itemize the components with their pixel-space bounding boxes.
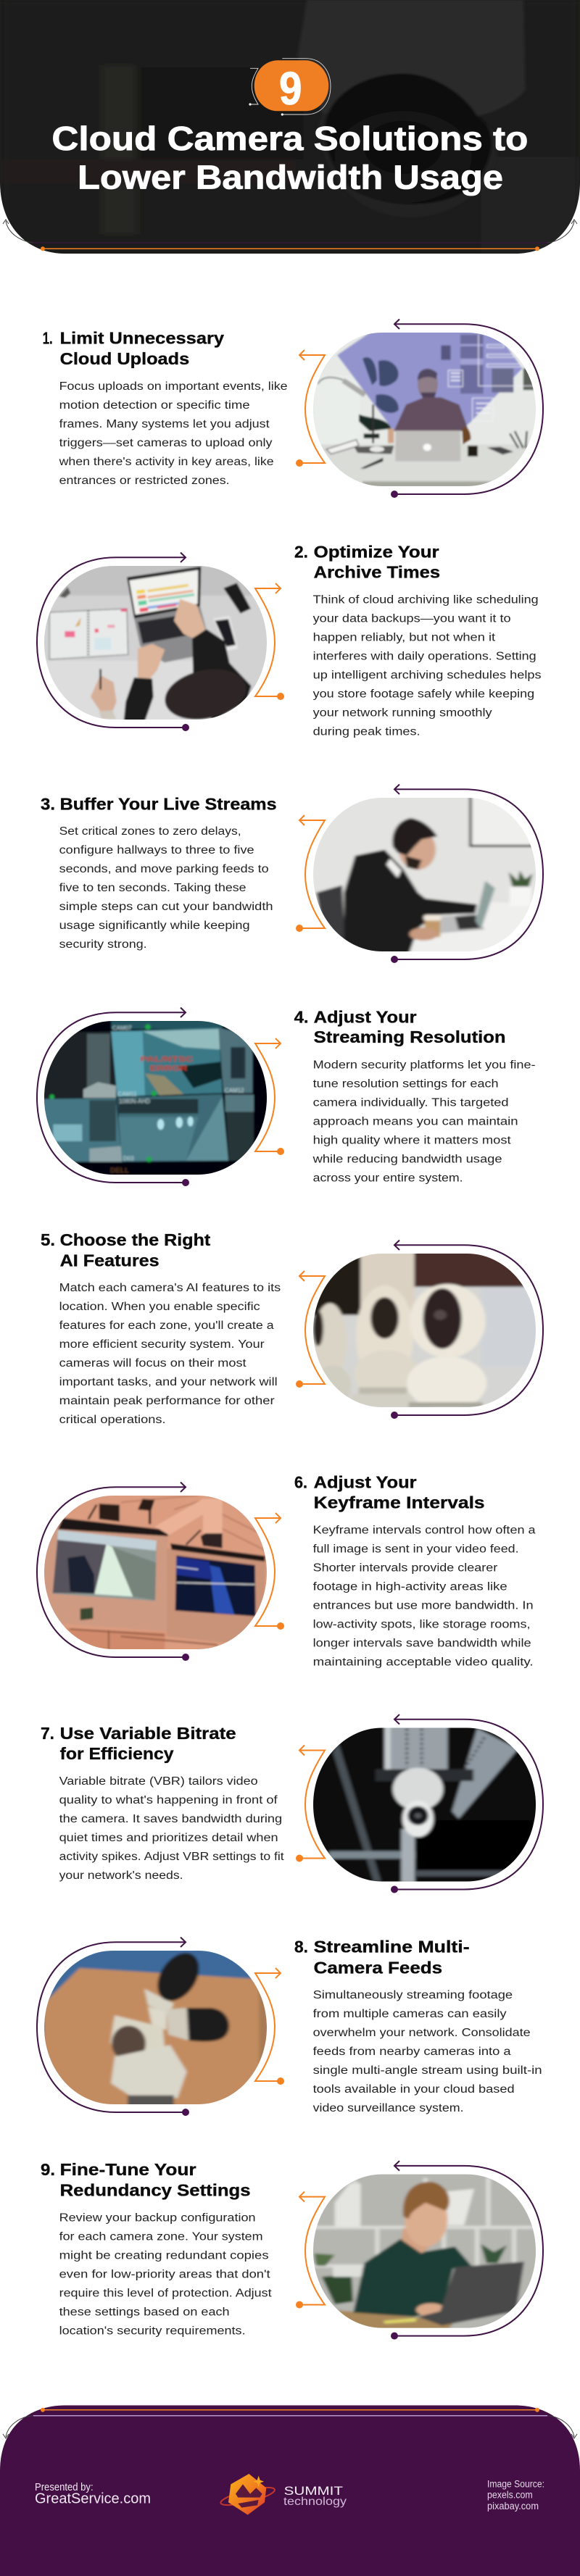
body text 7 <box>59 1775 284 1882</box>
body text 4: tune resolution settings for each <box>313 1077 499 1090</box>
section 1: limit uploads <box>43 319 543 498</box>
heading 7: Use Variable Bitrate <box>60 1724 236 1743</box>
heading 5 <box>41 1230 211 1270</box>
orange arrow 1 <box>296 350 325 467</box>
body text 2: interferes with daily operations. Setting <box>313 650 536 662</box>
body text 9: even for low-priority areas that don't <box>59 2268 270 2281</box>
body text 7: quality to what's happening in front of <box>59 1794 278 1806</box>
orange arrow 3 <box>296 815 325 932</box>
body text 2: Think of cloud archiving like scheduling <box>313 593 539 606</box>
body text 2: your network running smoothly <box>313 706 492 719</box>
body text 3: simple steps can cut your bandwidth <box>59 901 273 913</box>
body text 1: frames. Many systems let you adjust <box>59 418 270 430</box>
heading 2 <box>294 542 440 582</box>
footer panel <box>0 2406 580 2576</box>
heading 7 <box>41 1724 236 1763</box>
body text 5: cameras will focus on their most <box>59 1357 246 1370</box>
purple arrow 4 <box>37 1007 189 1186</box>
body text 7: the camera. It saves bandwidth during <box>59 1813 282 1825</box>
body text 2: happen reliably, but not when it <box>313 631 496 643</box>
image sources <box>487 2478 544 2512</box>
heading 4: Adjust Your <box>314 1007 417 1026</box>
body text 5: location. When you enable specific <box>59 1301 260 1313</box>
section 5: AI features <box>41 1230 543 1426</box>
body text 9: require this level of protection. Adjust <box>59 2287 272 2300</box>
body text 6: Shorter intervals provide clearer <box>313 1562 497 1574</box>
header background photo: security camera <box>0 0 580 254</box>
presented by <box>35 2482 151 2507</box>
heading 6: Keyframe Intervals <box>314 1493 485 1512</box>
photo: CCTV monitor wall: CAM07 <box>112 1025 132 1032</box>
orange arrow 6 <box>255 1513 284 1630</box>
company logo <box>220 2474 347 2515</box>
body text 9: these settings based on each <box>59 2306 230 2319</box>
body text 8: Simultaneously streaming footage <box>313 1989 513 2001</box>
body text 8: video surveillance system. <box>313 2102 464 2114</box>
heading 1: Limit Unnecessary <box>60 329 224 348</box>
purple arrow 6 <box>37 1483 189 1661</box>
body text 5 <box>59 1282 281 1426</box>
photo: CCTV monitor wall: 1080N-AHD <box>119 1098 150 1104</box>
purple arrow 1 <box>391 319 543 498</box>
body text 6: low-activity spots, like storage rooms, <box>313 1618 531 1630</box>
body text 1: when there's activity in key areas, like <box>58 456 274 468</box>
body text 4: Modern security platforms let you fine- <box>313 1059 536 1071</box>
section 2: archive times <box>37 542 542 738</box>
body text 4: across your entire system. <box>313 1172 463 1184</box>
orange arrow 2 <box>255 583 284 700</box>
photo: dome camera on ceiling <box>311 1725 540 1885</box>
presented by: Presented by: <box>35 2482 94 2493</box>
body text 7: activity spikes. Adjust VBR settings to fit <box>59 1851 284 1863</box>
body text 7: Variable bitrate (VBR) tailors video <box>59 1775 258 1788</box>
body text 9 <box>59 2212 272 2338</box>
presented by: GreatService.com <box>35 2491 151 2507</box>
heading 9 <box>41 2160 251 2200</box>
company logo: technology <box>283 2496 347 2508</box>
photo: row of white cameras <box>311 1250 540 1409</box>
body text 3 <box>59 825 273 951</box>
heading 3: 3. <box>41 794 55 813</box>
body text 5: features for each zone, you'll create a <box>59 1320 274 1332</box>
body text 8: single multi-angle stream using built-in <box>313 2064 542 2077</box>
body text 3: seconds, and move parking feeds to <box>59 863 269 875</box>
section 4: streaming resolution <box>37 1007 536 1186</box>
heading 1: 1. <box>43 329 53 348</box>
body text 8 <box>313 1989 542 2114</box>
body text 1 <box>58 380 288 487</box>
body text 2: up intelligent archiving schedules helps <box>313 669 542 681</box>
heading 1 <box>43 329 224 368</box>
body text 4: approach means you can maintain <box>313 1115 518 1127</box>
number badge <box>249 59 331 116</box>
body text 6: longer intervals save bandwidth while <box>313 1637 531 1649</box>
body text 4: while reducing bandwidth usage <box>312 1153 502 1165</box>
body text 6: full image is sent in your video feed. <box>313 1543 519 1555</box>
photo: CCTV monitor wall: DELL <box>110 1167 129 1175</box>
body text 6: maintaining acceptable video quality. <box>313 1656 534 1668</box>
footer accent lines <box>3 2408 577 2438</box>
photo: platform monitors <box>41 1493 270 1652</box>
body text 5: Match each camera's AI features to its <box>59 1282 281 1294</box>
orange arrow 9 <box>296 2192 325 2309</box>
heading 4: 4. <box>294 1007 309 1026</box>
heading 2: 2. <box>294 542 308 561</box>
section 7: variable bitrate <box>41 1714 543 1893</box>
body text 6: entrances but use more bandwidth. In <box>313 1599 534 1612</box>
photo: overhead desk with laptop <box>41 564 270 727</box>
heading 5: Choose the Right <box>60 1230 211 1249</box>
image sources: Image Source: <box>487 2478 544 2490</box>
heading 7: 7. <box>41 1724 54 1743</box>
photo: CCTV monitor wall <box>41 1018 270 1177</box>
image sources: pexels.com <box>487 2490 533 2501</box>
purple arrow 9 <box>391 2161 543 2340</box>
heading 9: Redundancy Settings <box>60 2181 251 2200</box>
body text 5: maintain peak performance for other <box>59 1395 275 1407</box>
header panel <box>0 0 580 254</box>
body text 3: configure hallways to three to five <box>59 844 254 856</box>
body text 3: security strong. <box>59 938 147 951</box>
body text 8: tools available in your cloud based <box>313 2083 515 2096</box>
company logo: SUMMIT <box>284 2484 343 2498</box>
heading 3: Buffer Your Live Streams <box>60 794 277 813</box>
heading 6: 6. <box>294 1472 307 1491</box>
body text 1: Focus uploads on important events, like <box>59 380 288 393</box>
orange arrow 8 <box>255 1968 284 2085</box>
body text 4: high quality where it matters most <box>313 1134 511 1146</box>
body text 2: during peak times. <box>313 725 420 738</box>
heading 2: Archive Times <box>314 563 440 582</box>
heading 5: 5. <box>41 1230 55 1249</box>
body text 7: quiet times and prioritizes detail when <box>59 1832 278 1844</box>
title: Cloud Camera Solutions to <box>51 120 528 157</box>
photo: cluster of bullet cameras <box>41 1948 270 2107</box>
section 8: multi-camera feeds <box>37 1938 542 2116</box>
body text 4: camera individually. This targeted <box>313 1096 509 1109</box>
body text 8: from multiple cameras can easily <box>313 2008 507 2020</box>
body text 8: overwhelm your network. Consolidate <box>313 2027 531 2039</box>
photo: CCTV monitor wall: ERROR <box>150 1065 187 1073</box>
orange arrow 7 <box>296 1745 325 1862</box>
purple arrow 5 <box>391 1241 543 1419</box>
body text 1: motion detection or specific time <box>59 399 250 412</box>
photo: man at laptop <box>312 331 539 488</box>
purple arrow 8 <box>37 1938 189 2116</box>
photo: CCTV monitor wall: CAM11 <box>118 1091 137 1097</box>
body text 9: location's security requirements. <box>59 2325 246 2338</box>
heading 1: Cloud Uploads <box>60 349 189 368</box>
purple arrow 2 <box>37 552 189 731</box>
heading 4 <box>294 1007 506 1046</box>
body text 3: usage significantly while keeping <box>59 920 250 932</box>
title: Lower Bandwidth Usage <box>78 159 503 196</box>
heading 2: Optimize Your <box>314 542 439 561</box>
image sources: pixabay.com <box>487 2501 539 2512</box>
body text 2 <box>313 593 542 738</box>
photo: CCTV monitor wall: D03 <box>123 1156 134 1162</box>
photo: man in hoodie at laptop <box>311 795 540 955</box>
heading 8: 8. <box>294 1938 308 1956</box>
body text 9: Review your backup configuration <box>59 2212 256 2225</box>
section 6: keyframe intervals <box>37 1472 536 1668</box>
body text 2: your data backups—you want it to <box>313 612 511 625</box>
body text 2: you store footage safely while keeping <box>313 688 534 700</box>
body text 3: five to ten seconds. Taking these <box>59 882 246 894</box>
body text 5: more efficient security system. Your <box>59 1338 265 1351</box>
body text 7: your network's needs. <box>59 1870 183 1882</box>
heading 6: Adjust Your <box>314 1472 417 1491</box>
body text 3: Set critical zones to zero delays, <box>59 825 241 838</box>
heading 8: Camera Feeds <box>314 1958 442 1977</box>
purple arrow 7 <box>391 1714 543 1893</box>
body text 1: entrances or restricted zones. <box>59 475 230 487</box>
body text 6: Keyframe intervals control how often a <box>313 1524 536 1536</box>
body text 4 <box>312 1059 536 1184</box>
heading 4: Streaming Resolution <box>314 1028 506 1046</box>
photo: young man at laptop <box>311 2172 540 2330</box>
body text 9: for each camera zone. Your system <box>59 2230 263 2243</box>
number badge: 9 <box>279 62 302 114</box>
body text 6: footage in high-activity areas like <box>313 1580 508 1593</box>
header accent lines <box>3 220 577 251</box>
orange arrow 4 <box>255 1038 284 1155</box>
body text 6 <box>313 1524 536 1668</box>
photo: CCTV monitor wall: PAL/NTSC <box>140 1056 194 1064</box>
section 9: redundancy settings <box>41 2160 543 2340</box>
heading 5: AI Features <box>60 1251 160 1270</box>
body text 9: might be creating redundant copies <box>59 2249 269 2262</box>
orange arrow 5 <box>296 1271 325 1388</box>
body text 5: important tasks, and your network will <box>59 1376 278 1388</box>
section 3: buffer live streams <box>41 784 543 963</box>
title <box>51 120 528 196</box>
logo mark <box>220 2474 276 2515</box>
heading 8: Streamline Multi- <box>314 1938 470 1956</box>
body text 5: critical operations. <box>59 1414 166 1426</box>
purple arrow 3 <box>391 784 543 963</box>
body text 8: feeds from nearby cameras into a <box>313 2046 511 2058</box>
heading 6 <box>294 1472 485 1512</box>
photo: CCTV monitor wall: CAM12 <box>225 1087 244 1093</box>
body text 1: triggers—set cameras to upload only <box>59 437 273 449</box>
heading 8 <box>294 1938 470 1977</box>
heading 9: 9. <box>41 2160 55 2179</box>
heading 9: Fine-Tune Your <box>60 2160 196 2179</box>
heading 7: for Efficiency <box>60 1744 174 1763</box>
